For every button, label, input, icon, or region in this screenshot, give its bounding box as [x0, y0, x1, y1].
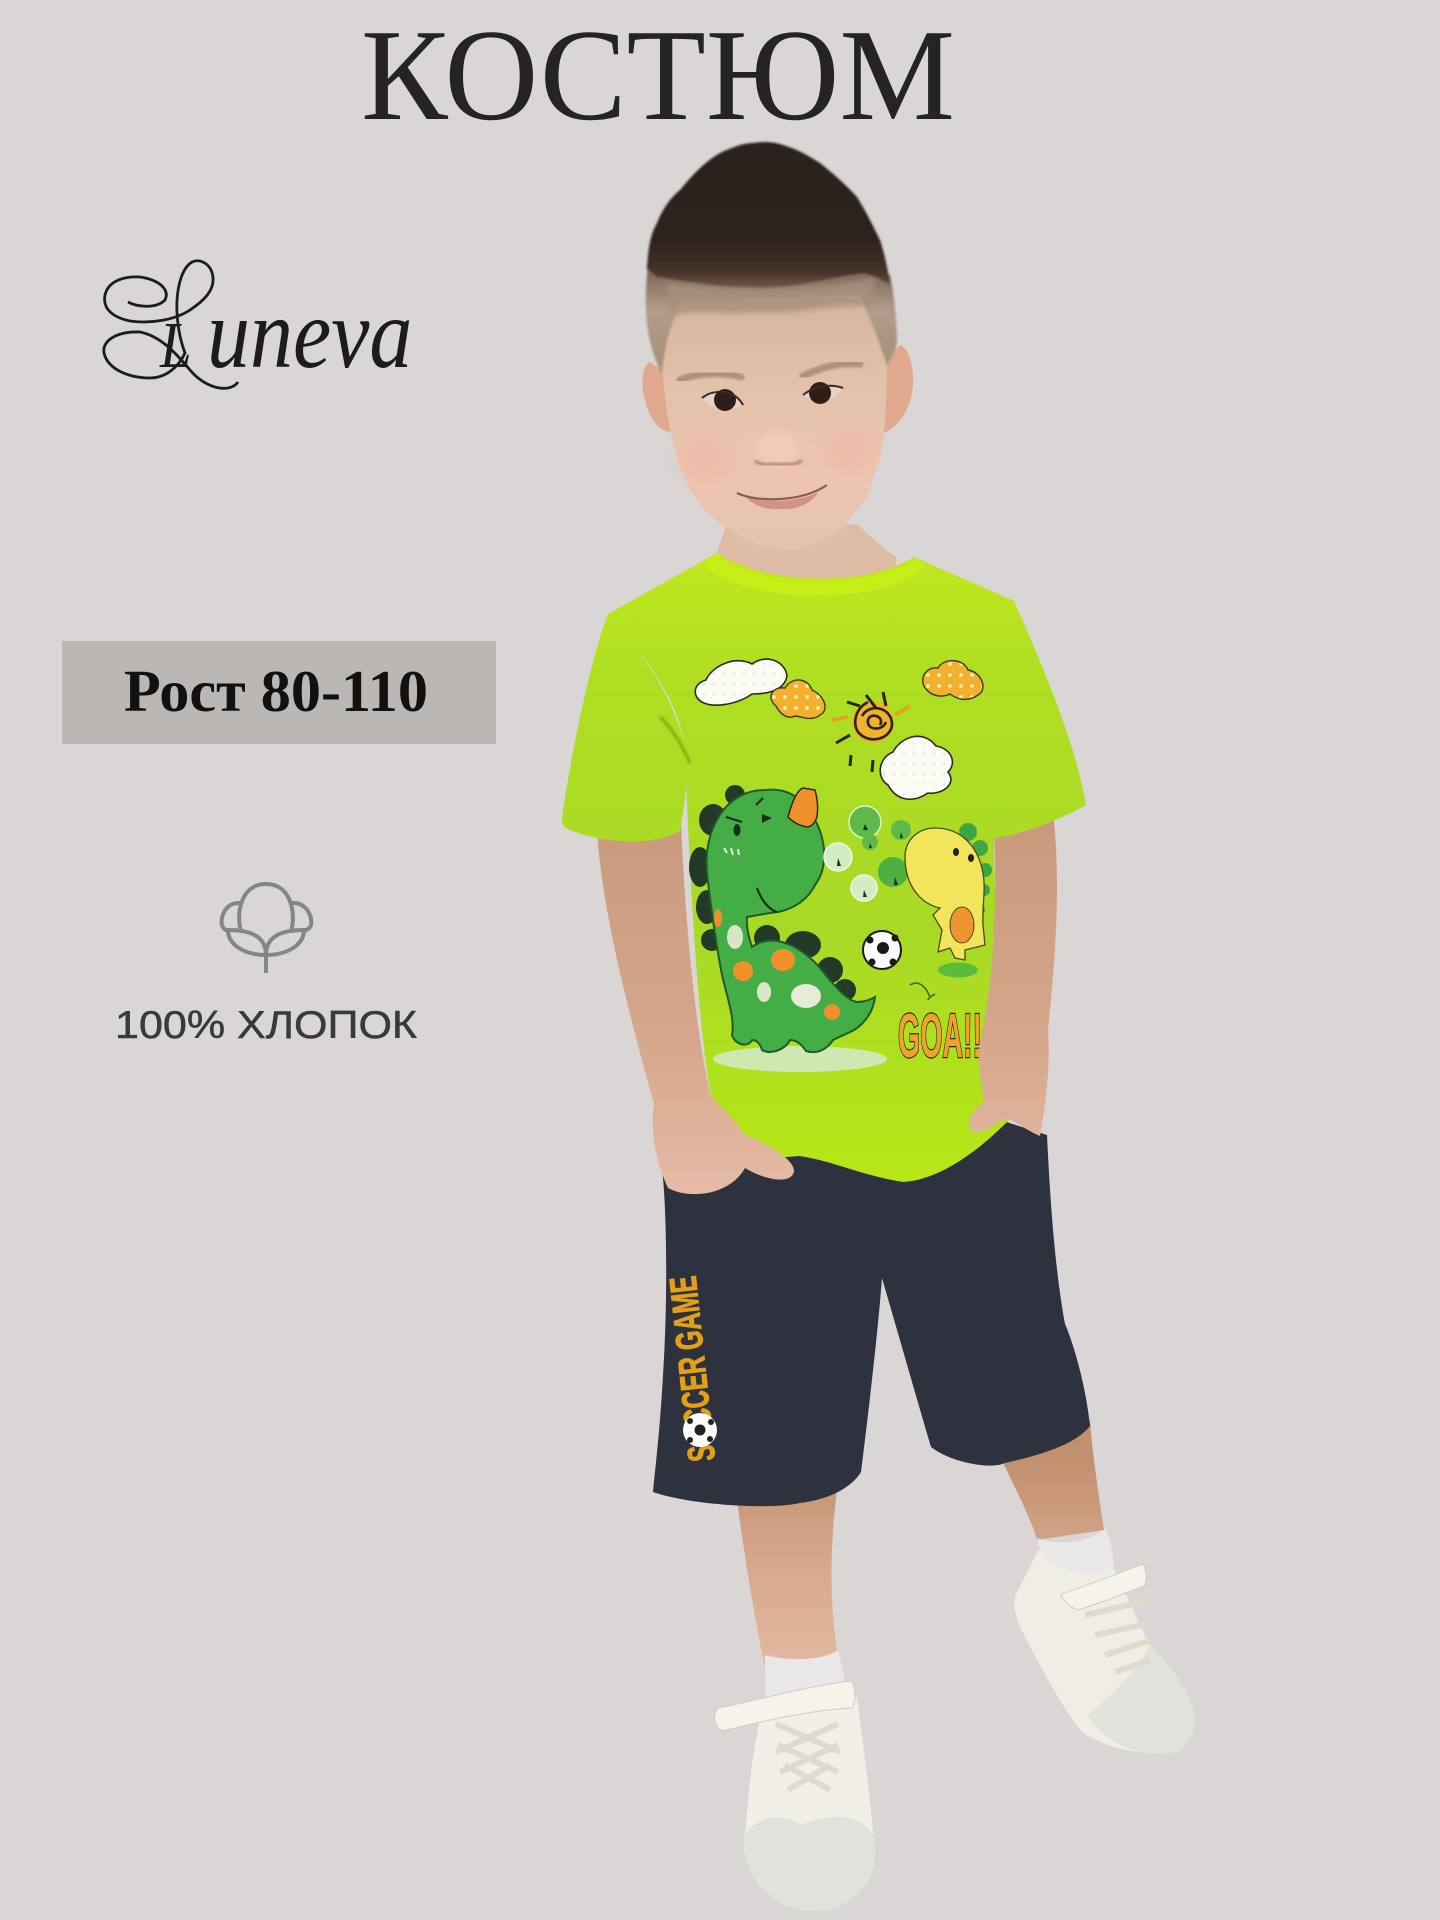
right ear: [878, 345, 913, 433]
dark hair: [647, 142, 890, 287]
right leg: [1000, 1420, 1104, 1540]
dinosaur face: [726, 798, 777, 912]
left eye: [702, 389, 743, 411]
right cheek blush: [826, 428, 874, 472]
hairline transition: [665, 278, 875, 316]
left cheek blush: [677, 438, 733, 482]
left ear: [642, 362, 676, 432]
velcro strap: [1061, 1564, 1146, 1610]
bird marks: [910, 983, 935, 1000]
shorts print text: SOCCER GAME: [663, 1274, 724, 1463]
right sleeve: [988, 601, 1086, 838]
shoe upper: [1014, 1549, 1195, 1753]
dinosaur spikes: [689, 785, 856, 1001]
right shoe: [1014, 1549, 1195, 1753]
right sock: [1037, 1528, 1114, 1585]
white cloud right: [880, 736, 952, 799]
badge background: [62, 641, 496, 744]
t-shirt collar: [703, 553, 925, 596]
dinosaur eyes: [734, 814, 772, 836]
panel: height badge: [62, 641, 496, 744]
logo swash: [104, 261, 238, 388]
yellow dino spikes: [959, 823, 992, 917]
dinosaur horn: [788, 788, 818, 827]
illustration: boy in costume: [562, 142, 1195, 1911]
yellow dino body: [905, 828, 985, 960]
ground shadow: [713, 1046, 887, 1072]
small ground patch: [938, 962, 978, 978]
t-shirt body: [608, 553, 1019, 1182]
white cloud left: [695, 659, 787, 705]
logo wordmark: Luneva: [159, 279, 412, 390]
title: КОСТЮМ: [361, 3, 955, 148]
laces: [1085, 1600, 1155, 1672]
right eye: [803, 382, 843, 404]
shorts print ball: [683, 1413, 717, 1447]
toe cap: [1087, 1645, 1195, 1753]
football: [863, 931, 901, 969]
nose: [755, 432, 802, 465]
sun: [832, 692, 910, 772]
t-shirt fold at armhole: [660, 717, 690, 763]
laces: [776, 1724, 840, 1790]
badge text: Рост 80-110: [124, 658, 428, 724]
icon: cotton boll: [222, 884, 311, 973]
shorts: [653, 1120, 1090, 1506]
trees: [824, 806, 911, 901]
shaved hair at the temples: [646, 250, 897, 375]
green dinosaur: [707, 790, 875, 1052]
left arm: [597, 822, 794, 1194]
shorts body: [653, 1120, 1090, 1506]
toe cap: [745, 1817, 875, 1911]
dinosaur cheek marks: [724, 848, 739, 855]
yellow dino belly: [950, 907, 974, 943]
velcro strap: [715, 1681, 855, 1731]
yellow dino eyes: [953, 848, 974, 862]
orange cloud right: [923, 661, 983, 699]
head: [642, 142, 913, 550]
right eyebrow: [803, 364, 860, 376]
t-shirt print: [689, 659, 992, 1072]
left sock: [765, 1650, 846, 1700]
logo: Luneva: [104, 261, 412, 390]
shoe upper: [744, 1697, 875, 1911]
mouth: [737, 485, 827, 509]
left sleeve: [562, 614, 687, 842]
material label: 100% ХЛОПОК: [115, 1004, 417, 1047]
face: [660, 290, 887, 550]
yellow dinosaur: [905, 823, 992, 960]
dinosaur body spots: [714, 909, 840, 1020]
right arm: [969, 805, 1057, 1136]
left eyebrow: [680, 374, 741, 380]
left leg: [737, 1490, 843, 1676]
neck: [716, 524, 897, 590]
t-shirt print: GOA!!: [898, 1002, 982, 1071]
orange cloud left: [771, 680, 825, 718]
left shoe: [715, 1681, 875, 1911]
